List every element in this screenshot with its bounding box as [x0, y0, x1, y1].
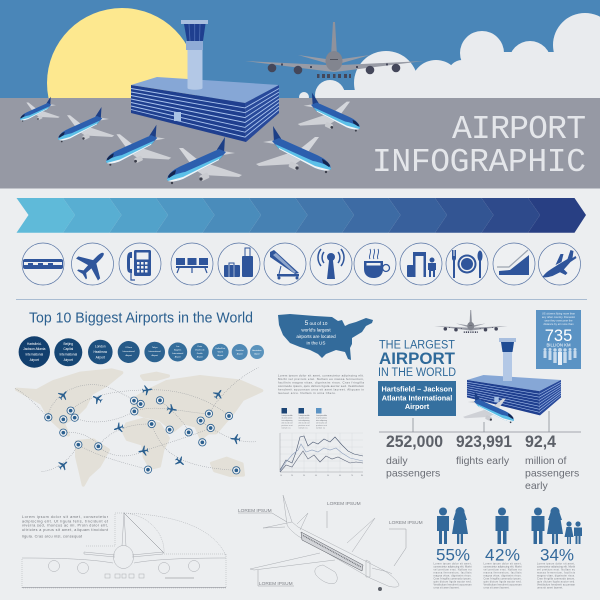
blueprint paragraph: ultricies a purus sit amet, aliquam tincidunt [22, 528, 108, 532]
distance panel: distance by air more than [543, 322, 574, 326]
airport name box: Hartsfield – Jackson [382, 384, 452, 394]
top 10 airport bubbles: Worth [218, 350, 223, 354]
chart legend [282, 408, 328, 430]
chart legend: elit morbi vel [282, 422, 293, 424]
top 10 airport bubbles: Amsterdam [252, 349, 262, 352]
airport name box: Atlanta International [382, 394, 452, 402]
stat people 55 percent [434, 507, 472, 590]
blueprint paragraph: ligula. Cras arcu nisl, consequat [22, 534, 82, 538]
top 10 airport bubbles: Paris [197, 346, 202, 348]
chart lines [280, 436, 363, 472]
chevron progress arrow [16, 198, 586, 233]
stat people 34 percent: Vestibulum hendrerit accumsan [537, 584, 576, 586]
top 10 airport bubbles: Airport [64, 358, 73, 362]
top 10 airport bubbles: Airport [175, 356, 181, 358]
top 10 airport bubbles: International [123, 350, 135, 353]
chart legend: tetur adipiscing [316, 419, 327, 422]
icon row [22, 242, 580, 286]
top 10 airport bubbles: Gaulle [197, 353, 203, 355]
title [372, 111, 586, 181]
chart legend: sit amet consec [298, 416, 310, 420]
chart ticks: 30 [303, 475, 306, 477]
US map callout: 5 out of 10 [305, 320, 328, 327]
line chart with legend [280, 408, 364, 477]
stat people 42 percent: massa fermentum, facilisis [484, 572, 522, 574]
top 10 airport bubbles: International [60, 352, 77, 356]
distance panel: any other country. Domestic [542, 315, 576, 319]
top 10 airport bubbles: O'Hare [125, 346, 133, 349]
airport markers [45, 397, 240, 474]
stat people 55 percent: magna vitae, dignissim risus. [434, 574, 472, 578]
top 10 airport bubbles: Dallas/Fort [215, 347, 226, 350]
clouds [299, 13, 600, 115]
chart ticks: 50 [327, 475, 330, 477]
chart legend: Lorem ipsum dolor [282, 415, 293, 417]
chart legend: tetur adipiscing [282, 419, 292, 422]
stat people 34 percent: Cras fringilla commodo ipsum, [537, 578, 575, 580]
heading: the largest airport: IN THE WORLD [378, 367, 456, 379]
stat: daily passengers [386, 432, 443, 480]
top 10 airport bubbles: Hartsfield- [27, 342, 42, 346]
icon: telephone [119, 243, 161, 285]
stat people 55 percent: quis dictum ligula auctor sed. [434, 580, 472, 584]
small airliner [434, 310, 508, 333]
stat: daily passengers: daily [386, 455, 408, 467]
chart ticks: 60 [339, 475, 342, 477]
distance panel: BILLION KM [546, 342, 571, 348]
icon: coffee cup [354, 243, 396, 285]
stat: million of passengers [525, 432, 579, 492]
stat people 55 percent: Cras fringilla commodo ipsum, [434, 578, 472, 580]
top 10 airport bubbles: Airport [30, 358, 39, 362]
stat: million of passengers: 92,4 [525, 432, 557, 451]
stat: million of passengers: early [525, 480, 549, 492]
lorem paragraph: facilisis magna vitae, dignissim risus. Cras fringilla [278, 380, 364, 384]
US map callout: airports are located [296, 334, 336, 339]
chart ticks: 80 [361, 475, 364, 477]
stat people 34 percent: 34% [540, 546, 574, 565]
blueprint callout labels [238, 501, 423, 587]
stat people 42 percent: vel pretium erat. Nullam eu [484, 568, 522, 572]
stat people 42 percent: Lorem ipsum dolor sit amet, [484, 562, 522, 566]
lorem paragraph: Morbi vel pretium erat. Nullam eu massa fermentum, [278, 377, 364, 381]
top 10 airport bubbles: Airport [96, 356, 105, 360]
blueprint callout labels: LOREM IPSUM [389, 520, 423, 526]
sun [47, 8, 197, 158]
stat people 34 percent [532, 507, 582, 590]
icon: airplane [71, 242, 114, 286]
blueprint paragraph: Lorem ipsum dolor sit amet, consectetur [22, 515, 109, 519]
icon: plate and cutlery [446, 243, 488, 285]
chart legend: sit amet consec [316, 416, 327, 420]
chart legend: Lorem ipsum dolor [298, 415, 310, 417]
icon: escalator [493, 243, 535, 285]
distance panel: 735 [545, 327, 572, 345]
distance panel: US citizens flying more than [542, 312, 576, 316]
stat people 34 percent: massa fermentum, facilisis [537, 572, 576, 574]
stat: daily passengers: passengers [386, 468, 440, 480]
passenger silhouettes [544, 348, 576, 365]
title: INFOGRAPHIC [372, 144, 586, 181]
chart legend: pretium erat [316, 424, 328, 427]
chart legend: elit morbi vel [298, 422, 310, 424]
sky [0, 0, 600, 98]
chart ticks: 20 [291, 475, 294, 477]
world map [15, 368, 262, 485]
US map callout [278, 314, 373, 360]
chart legend: nullam eu [316, 428, 325, 430]
control tower [181, 20, 208, 90]
top 10 airport bubbles: Heathrow [93, 350, 108, 354]
top 10 airport bubbles: Tokyo [152, 347, 158, 349]
blueprint callout labels: LOREM IPSUM [327, 501, 361, 507]
route planes [56, 384, 241, 472]
icon: security gate [400, 243, 442, 285]
stat people 55 percent: massa fermentum, facilisis [434, 572, 472, 574]
top 10 airport bubbles: Los [176, 346, 179, 348]
top 10 airport bubbles: Airport [237, 352, 243, 356]
chart legend: nullam eu [298, 428, 308, 430]
chart axis [280, 433, 363, 472]
blueprint: side view plane [238, 495, 406, 591]
US map callout: world's largest [301, 328, 331, 332]
heading: top 10 airports: Top 10 Biggest Airports in the World [29, 310, 253, 326]
lorem paragraph: hendrerit accumsan urna sit amet laoreet. Aliquam in [278, 388, 364, 392]
blueprint callout labels: LOREM IPSUM [238, 508, 272, 514]
blueprint callout labels: LOREM IPSUM [259, 581, 293, 587]
stat people 34 percent: consectetur adipiscing elit. Morbi [537, 566, 575, 568]
distance panel [536, 310, 581, 369]
heading: the largest airport [378, 339, 456, 379]
top 10 airport bubbles: Charles de [195, 350, 205, 352]
top 10 airport bubbles: Beijing [64, 342, 73, 346]
stat people 42 percent: Vestibulum hendrerit accumsan [484, 584, 522, 586]
chart legend: sit amet consec [282, 416, 293, 420]
heading: the largest airport: AIRPORT [379, 349, 456, 368]
icon: wifi antenna [310, 243, 352, 285]
stat: million of passengers: passengers [525, 468, 579, 480]
stat people 34 percent: Lorem ipsum dolor sit amet, [537, 562, 575, 566]
lorem paragraph: laoreet arcu. Nullam in urna libero. [278, 391, 336, 395]
stat leader lines [379, 411, 581, 432]
blueprint: front view plane [22, 513, 226, 588]
top 10 airport bubbles: Airport [125, 354, 132, 357]
stat: flights early: flights early [456, 455, 510, 467]
stat people 55 percent: urna sit amet laoreet. [434, 586, 460, 590]
lorem paragraph: commodo ipsum, quis dictum ligula auctor sed. Vestibulum [278, 384, 365, 388]
top 10 airport bubbles: Jackson Atlanta [23, 347, 46, 351]
chart ticks: 40 [315, 475, 318, 477]
top 10 airport bubbles: Airport [151, 354, 158, 357]
lorem paragraph: Lorem ipsum dolor sit amet, consectetur adipiscing elit. [278, 374, 364, 378]
airport name box [378, 381, 456, 416]
blueprint paragraph [22, 515, 109, 538]
header scene [0, 0, 600, 188]
stat people 42 percent: urna sit amet laoreet. [484, 586, 510, 590]
chart legend: Lorem ipsum dolor [316, 415, 327, 417]
stat people 34 percent: quis dictum ligula auctor sed. [537, 580, 575, 584]
ground [0, 98, 600, 188]
terminal building [131, 77, 279, 142]
stat people 55 percent: Lorem ipsum dolor sit amet, [434, 562, 472, 566]
stat: million of passengers: million of [525, 455, 567, 467]
large airliner in flight [245, 22, 424, 78]
terminal illustration [463, 338, 561, 423]
icon: luggage [218, 243, 260, 285]
stat people 55 percent: consectetur adipiscing elit. Morbi [434, 566, 472, 568]
stat people 34 percent: vel pretium erat. Nullam eu [537, 568, 576, 572]
stat people 55 percent: Vestibulum hendrerit accumsan [434, 584, 472, 586]
parked planes [20, 92, 360, 184]
stat people 42 percent: Cras fringilla commodo ipsum, [484, 578, 522, 580]
title: AIRPORT [452, 111, 586, 148]
stat: flights early: 923,991 [456, 432, 512, 451]
stat people 34 percent: magna vitae, dignissim risus. [537, 574, 575, 578]
chart ticks: 10 [280, 475, 283, 477]
blueprint paragraph: adipiscing elit. Ut ligula felis, tincidunt et [22, 519, 108, 523]
stat people 34 percent: urna sit amet laoreet. [537, 586, 563, 590]
stat people 42 percent: quis dictum ligula auctor sed. [484, 580, 522, 584]
icon: boarding stairs [264, 243, 306, 285]
continents [17, 370, 262, 485]
distance panel: year they overcome the [544, 318, 573, 322]
US map callout: in the US [307, 340, 325, 346]
top 10 airport bubbles: International [26, 352, 43, 356]
chart legend: pretium erat [282, 424, 293, 427]
icon: departing plane [538, 243, 580, 285]
top 10 airport bubbles: International [172, 352, 184, 355]
chart grid [280, 433, 363, 472]
stat people 42 percent: magna vitae, dignissim risus. [484, 574, 522, 578]
chart ticks [280, 475, 364, 477]
top 10 airport bubbles: Capital [63, 347, 74, 351]
top 10 airport bubbles: International [149, 350, 161, 353]
chart legend: pretium erat [298, 424, 310, 427]
flight routes [15, 368, 258, 472]
stat people 42 percent: 42% [485, 546, 520, 565]
top 10 airport bubbles: Angeles [174, 348, 181, 352]
top 10 airport bubbles: Airport [254, 352, 260, 356]
top 10 airport bubbles: Airport [217, 354, 224, 357]
stat people 42 percent: consectetur adipiscing elit. Morbi [484, 566, 522, 568]
top 10 airport bubbles: Airport [197, 356, 203, 358]
blueprint paragraph: viverra sed, rhoncus ac mi. Proin dolor elit, [22, 524, 108, 528]
chart legend: elit morbi vel [316, 422, 328, 424]
stat people 55 percent: vel pretium erat. Nullam eu [434, 568, 472, 572]
top 10 airport bubbles: London [95, 344, 106, 348]
stat: daily passengers: 252,000 [386, 432, 443, 451]
section divider [16, 299, 587, 300]
heading: the largest airport: THE LARGEST [379, 339, 455, 351]
stat people 55 percent: 55% [436, 546, 470, 565]
airport name box: Airport [405, 402, 430, 411]
top 10 airport bubbles [19, 336, 264, 368]
stat people 42 percent [484, 508, 522, 590]
chart legend: tetur adipiscing [298, 419, 310, 422]
chart legend: nullam eu [282, 428, 290, 430]
chart ticks: 70 [351, 475, 354, 477]
stat: flights early [456, 432, 512, 467]
icon: waiting seats [171, 243, 213, 285]
lorem paragraph [278, 374, 365, 395]
top 10 airport bubbles: Frankfurt [236, 349, 244, 352]
icon: train [22, 243, 64, 285]
